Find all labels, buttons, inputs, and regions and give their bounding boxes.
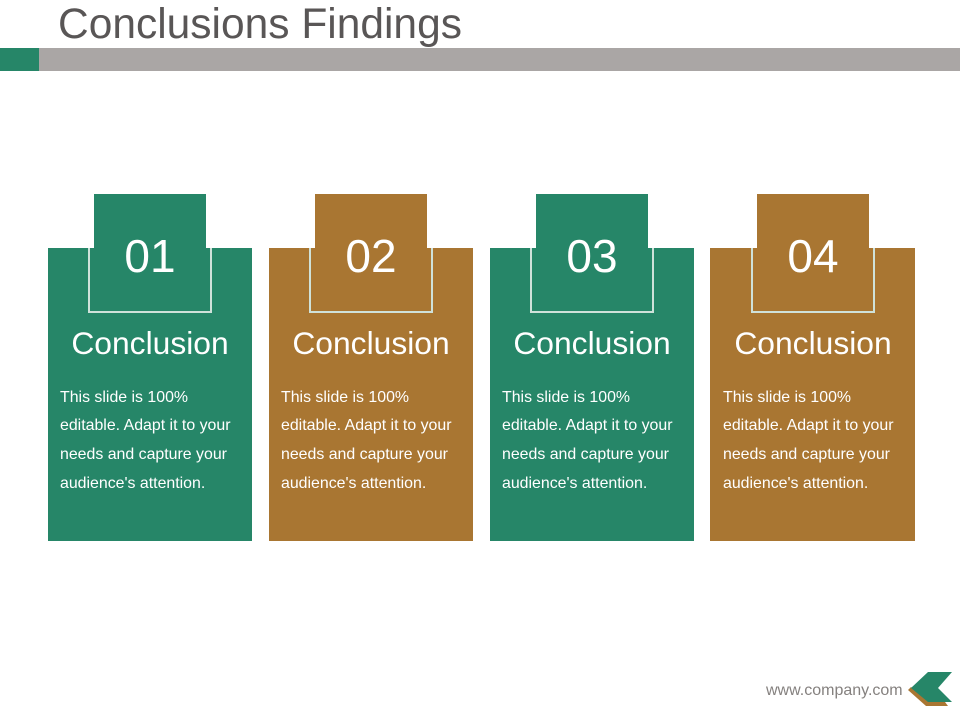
panel: conclusion 02: [269, 194, 473, 541]
text block: This slide is 100%: [60, 388, 188, 406]
text block: needs and capture your: [502, 446, 669, 463]
text block: needs and capture your: [281, 446, 448, 463]
heading: Conclusion: [513, 325, 671, 361]
panel body: [490, 248, 694, 541]
panel body: [269, 248, 473, 541]
text block: editable. Adapt it to your: [60, 417, 230, 434]
tab outline: [530, 248, 654, 313]
text block: editable. Adapt it to your: [502, 417, 672, 434]
footer url: www.company.com: [766, 682, 903, 699]
text block: [502, 388, 672, 492]
text block: needs and capture your: [60, 446, 227, 463]
header bar: [0, 48, 960, 71]
tab outline: [751, 248, 875, 313]
number tab: [315, 194, 427, 248]
title: Conclusions Findings: [58, 1, 462, 48]
tab outline: [309, 248, 433, 313]
text block: audience's attention.: [281, 475, 426, 492]
text block: [60, 388, 230, 492]
text block: editable. Adapt it to your: [723, 417, 894, 434]
number: 01: [124, 230, 176, 282]
number tab: [536, 194, 648, 248]
panel body: [48, 248, 252, 541]
text block: [281, 388, 452, 492]
text block: audience's attention.: [60, 475, 205, 492]
number: 04: [787, 230, 839, 282]
text block: editable. Adapt it to your: [281, 417, 452, 434]
text block: [723, 388, 894, 492]
panel: conclusion 04: [710, 194, 915, 541]
number: 02: [345, 230, 397, 282]
header bar accent: [0, 48, 39, 71]
text block: This slide is 100%: [502, 388, 630, 406]
text block: This slide is 100%: [723, 388, 851, 406]
heading: Conclusion: [71, 325, 229, 361]
text block: This slide is 100%: [281, 388, 409, 406]
tab outline: [88, 248, 212, 313]
panel: conclusion 01: [48, 194, 252, 541]
text block: audience's attention.: [723, 475, 868, 492]
panel body: [710, 248, 915, 541]
heading: Conclusion: [734, 325, 892, 361]
panel: conclusion 03: [490, 194, 694, 541]
text block: audience's attention.: [502, 475, 647, 492]
text block: needs and capture your: [723, 446, 890, 463]
number: 03: [566, 230, 618, 282]
number tab: [94, 194, 206, 248]
number tab: [757, 194, 869, 248]
heading: Conclusion: [292, 325, 450, 361]
icon: double chevron logo: [908, 672, 952, 706]
